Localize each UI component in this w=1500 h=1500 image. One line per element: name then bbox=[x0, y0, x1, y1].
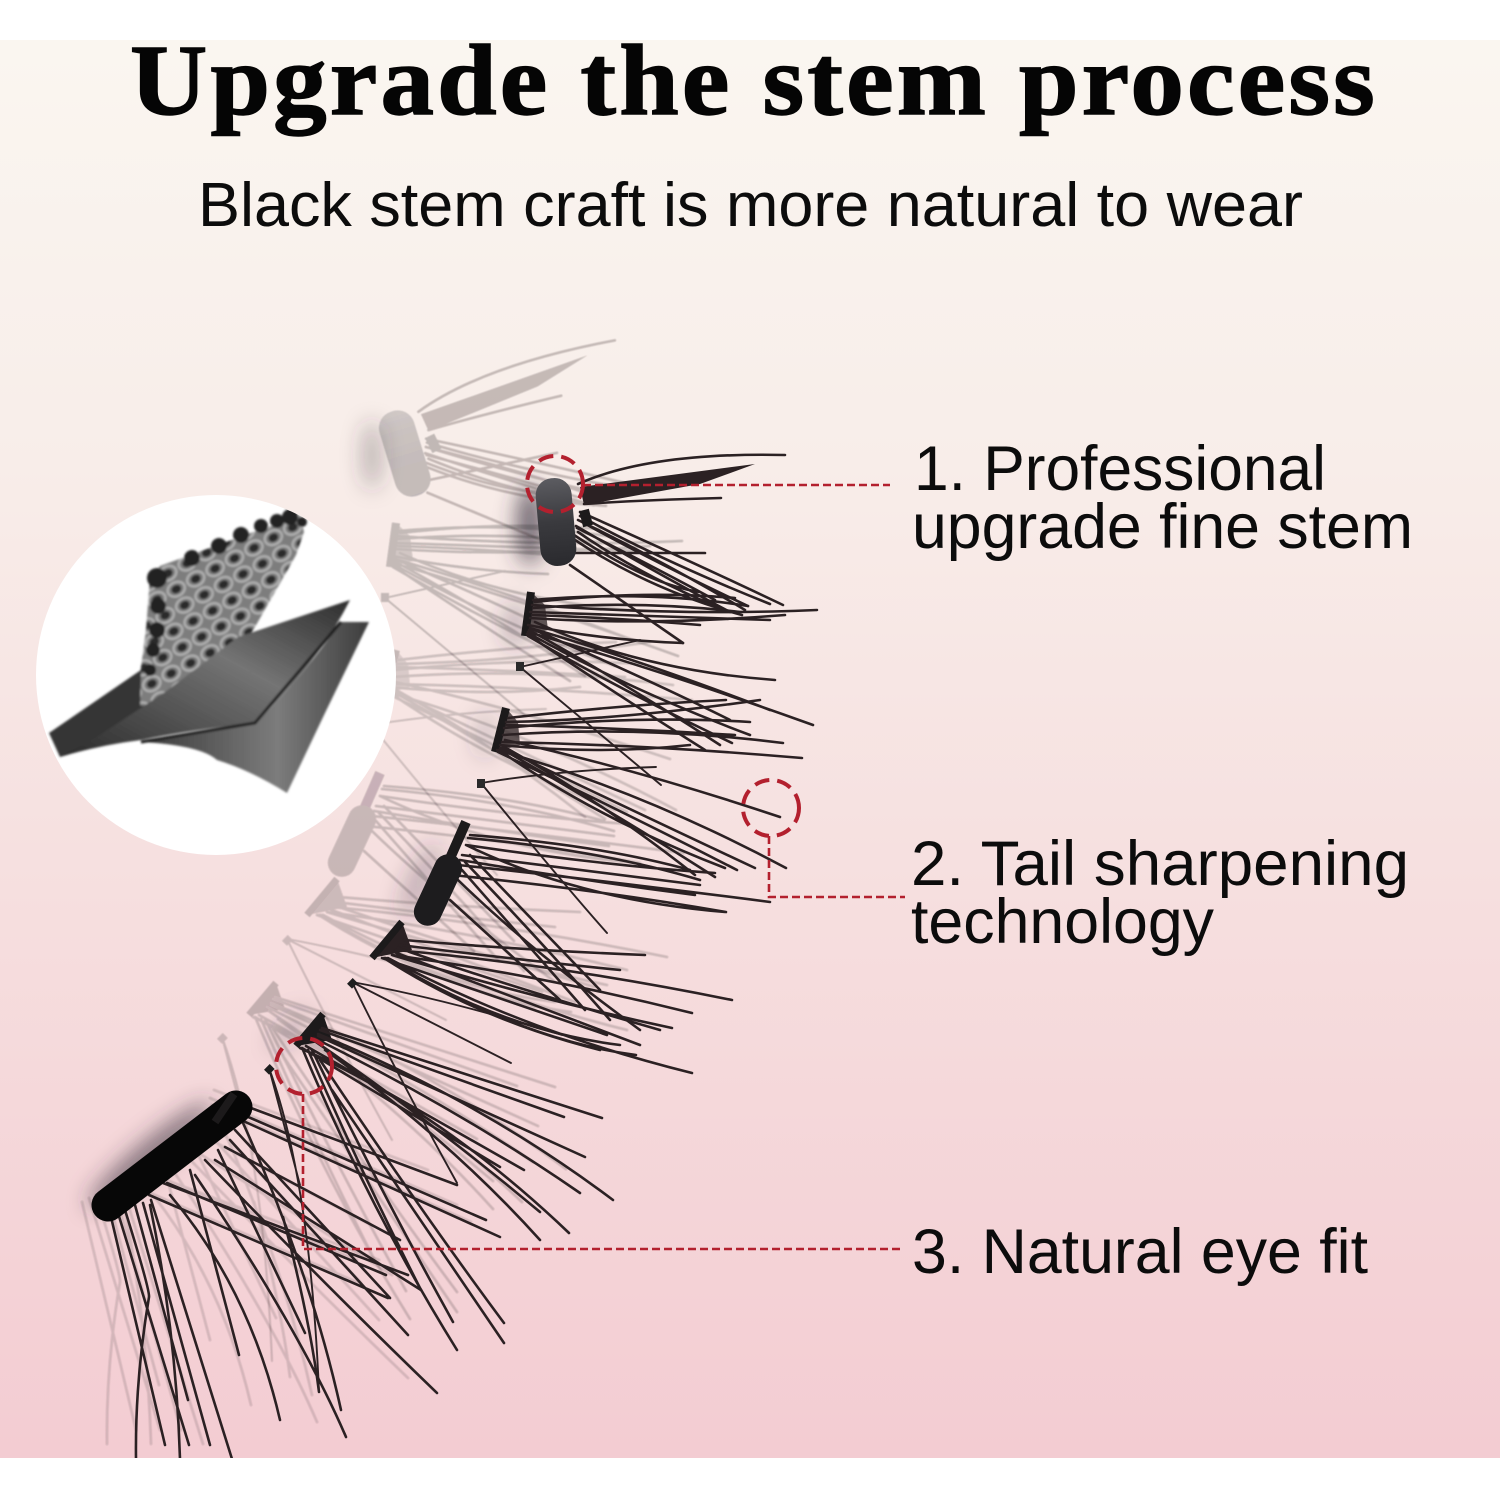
title: Upgrade the stem process bbox=[130, 24, 1378, 136]
mesh band bbox=[135, 515, 304, 722]
lash cluster 7 with magnet bbox=[108, 1094, 500, 1459]
label 1: 1. Professional bbox=[914, 434, 1326, 504]
label 2: 2. Tail sharpening bbox=[911, 829, 1409, 899]
lash cluster 5 bbox=[347, 922, 732, 1183]
left dark band bbox=[49, 670, 141, 757]
faded ghost lash reflection bbox=[82, 340, 692, 1444]
callout 1: fine stem bbox=[527, 434, 1413, 562]
callout 3: natural eye fit bbox=[276, 1038, 1368, 1287]
lash cluster 6 bbox=[264, 1014, 613, 1392]
detail circle: stem close-up bbox=[36, 495, 396, 855]
lash cluster 3 bbox=[477, 700, 802, 933]
label 2: technology bbox=[911, 887, 1214, 957]
mesh edge beads bbox=[144, 509, 307, 676]
subtitle: Black stem craft is more natural to wear bbox=[198, 171, 1303, 240]
lash cluster 4 with magnet bbox=[409, 822, 770, 1030]
label 3: 3. Natural eye fit bbox=[912, 1217, 1368, 1287]
lash cluster 1 with magnet bbox=[534, 455, 785, 643]
rear dark sheet bbox=[141, 622, 369, 793]
false lash clusters bbox=[108, 455, 817, 1459]
lash cluster 2 bbox=[516, 592, 817, 785]
front dark sheet bbox=[60, 600, 350, 757]
label 1: upgrade fine stem bbox=[912, 492, 1413, 562]
callout 2: tail sharpening bbox=[743, 780, 1409, 957]
soft shadows behind the lash bands bbox=[80, 421, 543, 1217]
label 2 bbox=[911, 829, 1409, 957]
label 1 bbox=[912, 434, 1413, 562]
